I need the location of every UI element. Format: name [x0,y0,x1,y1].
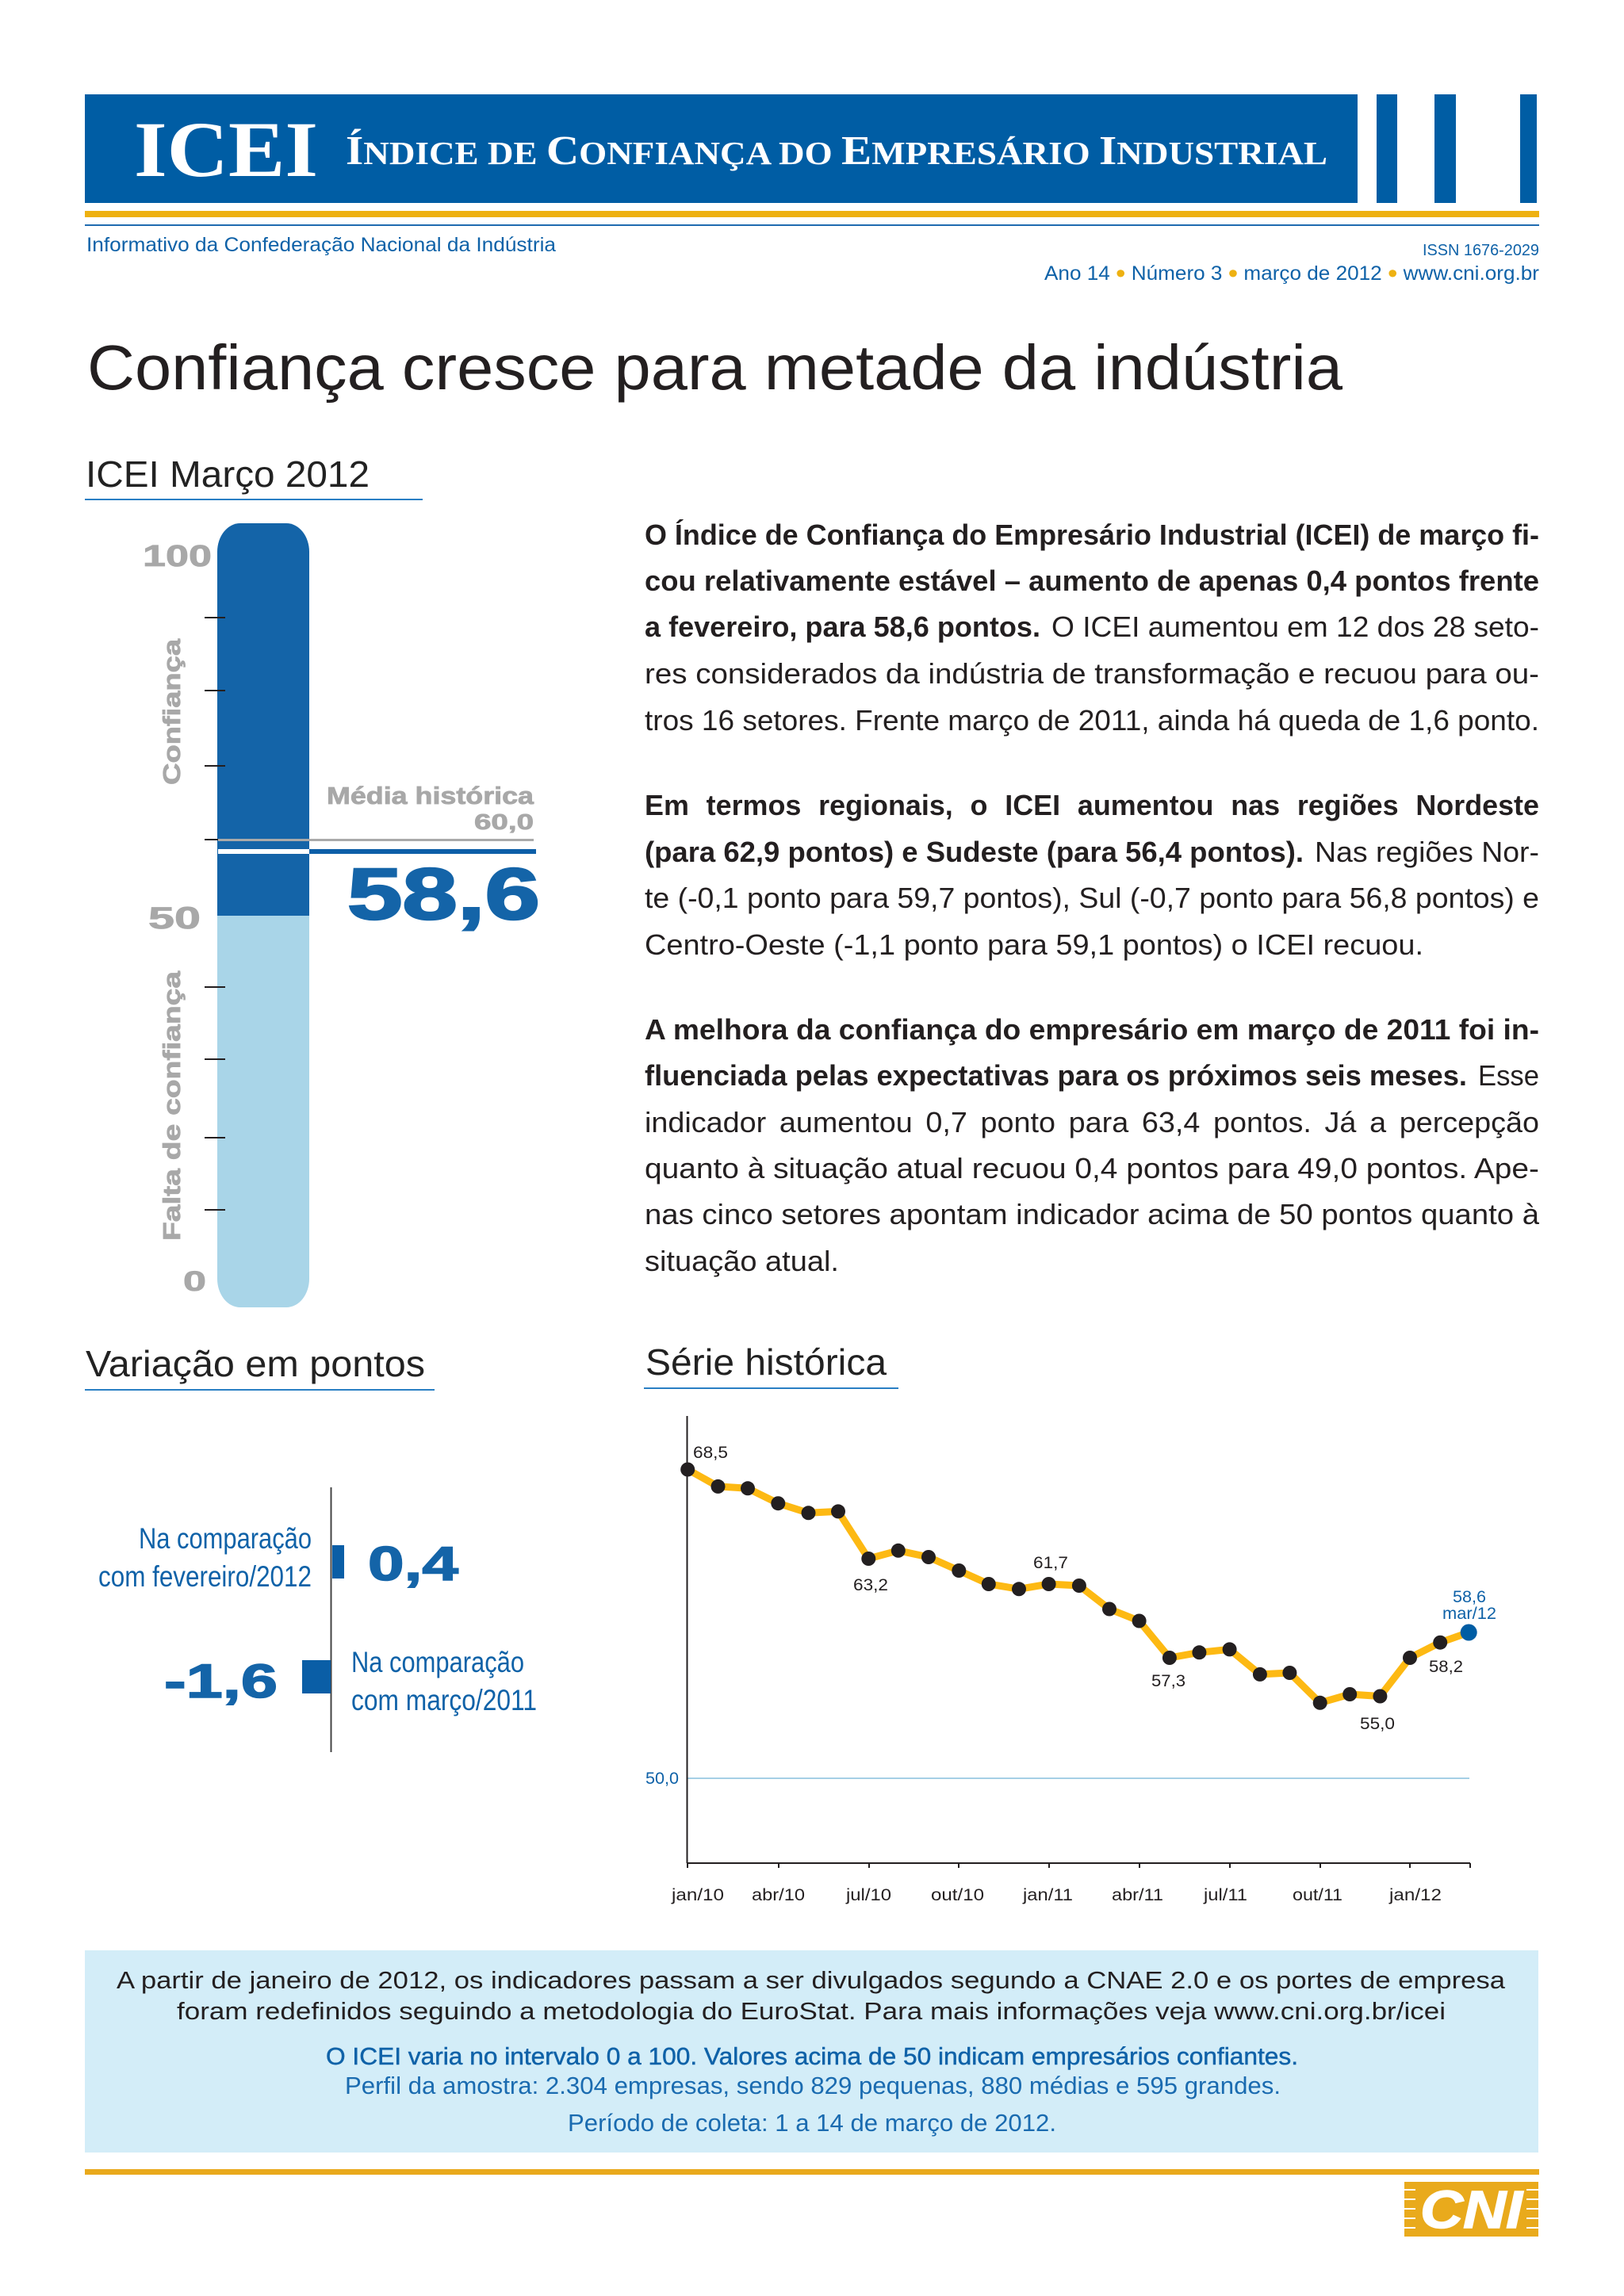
value labels: 61,7 [1033,1554,1068,1572]
data line [688,1470,1469,1703]
value: 0,4: 0,4 [368,1537,459,1590]
paragraph 3: situação atual. [645,1245,839,1277]
caption: março: Na comparação [351,1646,524,1678]
x-axis labels: jan/12 [1388,1886,1442,1904]
scale label 50: 50 [148,901,201,936]
x-axis labels: abr/11 [1112,1886,1163,1904]
main title: Confiança cresce para metade da indústria [87,332,1343,403]
data points [680,1462,1447,1710]
paragraph 1 [645,519,1539,737]
x-axis labels: jul/11 [1203,1886,1247,1904]
caption: março [351,1646,537,1716]
value labels: 58,6 [1453,1588,1486,1606]
x-axis labels: out/11 [1293,1886,1342,1904]
note text: A partir de janeiro de 2012, os indicadores passam a ser divulgados segundo a CNAE 2.0 e os portes de empresa [117,1966,1506,1994]
caption: fevereiro [98,1522,312,1593]
heading: Variação em pontos: Variação em pontos [86,1343,425,1384]
panel: methodology note [85,1950,1538,2152]
header banner [85,94,1537,203]
axes [687,1416,1470,1868]
value labels: 55,0 [1360,1715,1395,1733]
reference line 50,0 [687,1777,1469,1779]
label: média histórica: Média histórica [327,782,534,809]
value labels: 58,2 [1429,1658,1463,1676]
paragraph 2: Em termos regionais, o ICEI aumentou nas regiões Nordeste [645,789,1539,821]
variation bar chart [98,1487,537,1752]
x-axis labels: jan/10 [671,1886,724,1904]
icon: CNI logo: CNI [1420,2180,1524,2240]
banner title: ICEI: ICEI [134,105,318,193]
caption: fevereiro: com fevereiro/2012 [98,1560,312,1593]
paragraph 3: A melhora da confiança do empresário em março de 2011 foi in- [645,1013,1539,1046]
value labels [645,1444,1496,1788]
bar: -1,6 [302,1660,331,1693]
paragraph 1: res considerados da indústria de transformação e recuou para ou- [645,657,1539,690]
paragraph 1: O ICEI aumentou em 12 dos 28 seto- [1051,610,1539,643]
value labels: 57,3 [1151,1672,1185,1690]
paragraph 2 [645,789,1539,961]
panel: methodology note: foram redefinidos seguindo a metodologia do EuroStat. Para mais informações veja www.cni.org.br/icei [177,1997,1446,2025]
value: 60,0: 60,0 [474,809,534,834]
axis label: Confiança: Confiança [158,638,186,785]
value labels: 63,2 [853,1576,888,1594]
issue line: • [1228,258,1238,289]
issue line: Número 3 [1126,262,1228,285]
last point: mar/12 [1461,1624,1477,1641]
value labels: 68,5 [693,1444,728,1462]
paragraph 2: Nas regiões Nor- [1315,836,1539,868]
x-axis labels [671,1886,1442,1904]
paragraph 2: (para 62,9 pontos) e Sudeste (para 56,4 pontos). [645,836,1304,868]
x-axis labels: jul/10 [845,1886,891,1904]
paragraph 3 [645,1013,1540,1277]
issue line: Ano 14 [1044,262,1107,285]
heading: Série histórica: Série histórica [645,1341,887,1383]
line chart: historical series [645,1416,1496,1904]
paragraph 3: nas cinco setores apontam indicador acima de 50 pontos quanto à [645,1198,1540,1230]
scale label 100: 100 [143,540,212,573]
heading: ICEI Março 2012: ICEI Março 2012 [86,453,370,495]
paragraph 2: Centro-Oeste (-1,1 ponto para 59,1 pontos) o ICEI recuou. [645,928,1423,961]
paragraph 3: indicador aumentou 0,7 ponto para 63,4 pontos. Já a percepção [645,1106,1539,1138]
axis label: Falta de confiança: Falta de confiança [158,970,186,1241]
index range: O ICEI varia no intervalo 0 a 100. Valores acima de 50 indicam empresários confiantes. [326,2042,1298,2070]
issue line: www.cni.org.br [1397,262,1539,285]
value labels: mar/12 [1442,1605,1496,1623]
value labels: 50,0 [645,1770,679,1788]
paragraph 2: te (-0,1 ponto para 59,7 pontos), Sul (-0,7 ponto para 56,8 pontos) e [645,882,1539,914]
paragraph 3: fluenciada pelas expectativas para os próximos seis meses. [645,1059,1467,1092]
paragraph 1: tros 16 setores. Frente março de 2011, ainda há queda de 1,6 ponto. [645,704,1539,737]
banner subtitle: ÍNDICE DE CONFIANÇA DO EMPRESÁRIO INDUSTRIAL [346,128,1327,174]
ISSN: ISSN 1676-2029 [1423,242,1539,259]
paragraph 3: quanto à situação atual recuou 0,4 pontos para 49,0 pontos. Ape- [645,1152,1539,1184]
caption: março: com março/2011 [351,1684,537,1716]
gold header rule [85,211,1539,217]
paragraph 1: a fevereiro, para 58,6 pontos. [645,610,1040,643]
footer gold rule [85,2169,1539,2175]
issue line: • [1116,258,1126,289]
scale label 0: 0 [183,1266,206,1297]
caption: fevereiro: Na comparação [139,1522,312,1555]
paragraph 3: Esse [1478,1059,1539,1092]
icon: CNI logo [1404,2180,1538,2240]
x-axis labels: jan/11 [1022,1886,1073,1904]
article text [645,519,1540,1277]
x-axis labels: out/10 [931,1886,984,1904]
issue line: • [1388,258,1397,289]
x-axis labels: abr/10 [752,1886,805,1904]
issue line: março de 2012 [1238,262,1388,285]
publisher line: Informativo da Confederação Nacional da Indústria [86,234,556,256]
bar: +0,4 [332,1545,344,1578]
paragraph 1: O Índice de Confiança do Empresário Industrial (ICEI) de março fi- [645,519,1539,551]
paragraph 1: cou relativamente estável – aumento de apenas 0,4 pontos frente [645,564,1539,597]
sample profile: Perfil da amostra: 2.304 empresas, sendo 829 pequenas, 880 médias e 595 grandes. [345,2072,1281,2099]
collection period: Período de coleta: 1 a 14 de março de 2012. [568,2109,1056,2137]
value: 58,6: 58,6 [347,854,540,935]
value: -1,6: -1,6 [164,1655,278,1708]
thermometer gauge chart [143,523,540,1307]
